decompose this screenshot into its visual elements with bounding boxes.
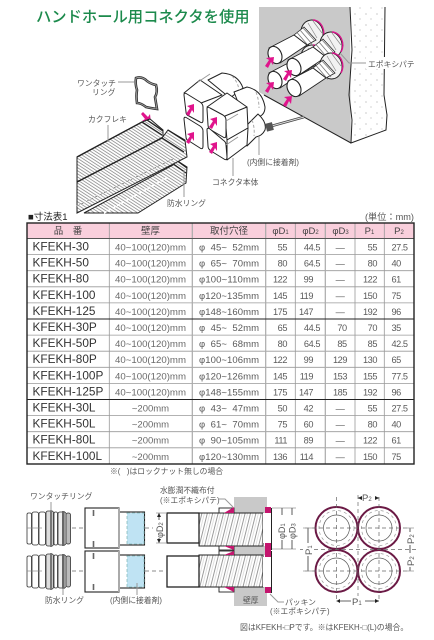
row KFEKH-30: 40~100(120)mm — [115, 242, 186, 254]
row KFEKH-80: 122 — [363, 275, 377, 285]
row KFEKH-100L: ~200mm — [132, 452, 169, 463]
row KFEKH-80L: — — [336, 436, 346, 446]
connector section lower — [85, 551, 144, 592]
row KFEKH-30P: 70 — [337, 323, 347, 333]
row KFEKH-125P: 40~100(120)mm — [115, 387, 186, 398]
left boxes — [184, 80, 222, 149]
row KFEKH-100: 40~100(120)mm — [115, 291, 186, 302]
dimension: D2 — [153, 513, 167, 543]
connector body — [184, 73, 265, 160]
row KFEKH-125: 175 — [273, 307, 287, 317]
row KFEKH-30P: 40~100(120)mm — [115, 323, 186, 334]
right boxes — [198, 74, 248, 160]
row KFEKH-50: 40 — [392, 259, 401, 269]
row KFEKH-125: — — [336, 307, 346, 317]
row KFEKH-30 — [32, 240, 408, 254]
dimension: D1 D3: φD3 — [288, 523, 298, 539]
pink arrows on connector — [186, 104, 217, 154]
row KFEKH-125: 40~100(120)mm — [115, 307, 186, 318]
row KFEKH-125: KFEKH-125 — [32, 304, 96, 318]
table header: φD2 — [302, 226, 319, 237]
row KFEKH-100P: 40~100(120)mm — [115, 371, 186, 382]
row KFEKH-50L: φ 61~ 70mm — [199, 420, 259, 431]
magenta packing — [224, 507, 271, 593]
label: one-touch ring: ワンタッチ — [77, 79, 116, 88]
dimension: D1 D3 — [272, 508, 298, 549]
row KFEKH-100L: 136 — [273, 452, 287, 462]
row KFEKH-80 — [32, 272, 401, 286]
dimension: P2 right — [404, 528, 417, 571]
row KFEKH-100: KFEKH-100 — [32, 288, 96, 302]
row KFEKH-50L: KFEKH-50L — [32, 417, 96, 431]
row KFEKH-50P: 85 — [368, 339, 377, 349]
dimension: P1 bottom: P1 — [352, 597, 362, 608]
row KFEKH-50L: 80 — [368, 420, 377, 430]
row KFEKH-80: φ100~110mm — [199, 275, 259, 286]
row KFEKH-80: KFEKH-80 — [32, 272, 89, 286]
row KFEKH-30L: 50 — [278, 404, 287, 414]
row KFEKH-80: 40~100(120)mm — [115, 275, 186, 286]
row KFEKH-80P: 99 — [304, 355, 313, 365]
row KFEKH-100P: KFEKH-100P — [32, 368, 103, 382]
dimension: D1 D3: φD1 — [277, 523, 287, 539]
row KFEKH-30: 55 — [278, 242, 287, 252]
row KFEKH-125P: 185 — [333, 387, 347, 397]
row KFEKH-125: 192 — [363, 307, 377, 317]
row KFEKH-80P: φ100~106mm — [199, 355, 259, 366]
row KFEKH-100P: 153 — [333, 371, 347, 381]
dimension: P2 top: P2 — [362, 493, 372, 504]
row KFEKH-30P — [32, 320, 401, 334]
row KFEKH-100: — — [336, 291, 346, 301]
row KFEKH-100L: φ120~130mm — [199, 452, 259, 463]
row KFEKH-50P: 40~100(120)mm — [115, 339, 186, 350]
row KFEKH-30L: 42 — [304, 404, 313, 414]
row KFEKH-30: 44.5 — [304, 242, 320, 252]
row KFEKH-50: 40~100(120)mm — [115, 259, 186, 270]
table heading: ■寸法表1 — [28, 211, 68, 223]
tube upper back — [265, 18, 325, 66]
row KFEKH-80L: 89 — [304, 436, 313, 446]
row KFEKH-30L: KFEKH-30L — [32, 400, 96, 414]
row KFEKH-80P: 130 — [363, 355, 377, 365]
row KFEKH-80P: 65 — [392, 355, 401, 365]
row KFEKH-100: 119 — [300, 291, 313, 301]
row KFEKH-50L: 75 — [278, 420, 287, 430]
row KFEKH-30P: 44.5 — [304, 323, 320, 333]
label: connector body: コネクタ本体 — [212, 177, 259, 187]
row KFEKH-125P — [32, 384, 401, 398]
label: one-touch ring: ワンタッチリング — [30, 491, 93, 501]
row KFEKH-100L: 75 — [392, 452, 401, 462]
pink insertion arrows on wall tubes — [265, 57, 292, 107]
pipe back — [77, 119, 163, 184]
row KFEKH-50: 64.5 — [304, 259, 320, 269]
tube upper front — [284, 30, 344, 78]
row KFEKH-50: KFEKH-50 — [32, 256, 89, 270]
label: packing: (※エポキシパテ) — [270, 607, 330, 616]
row KFEKH-80P: 40~100(120)mm — [115, 355, 186, 366]
row KFEKH-30L — [32, 400, 408, 414]
row KFEKH-100L: KFEKH-100L — [32, 449, 102, 463]
row KFEKH-50P: 85 — [337, 339, 347, 349]
row KFEKH-125P: 147 — [299, 387, 313, 397]
corrugated pipes — [77, 119, 187, 213]
glue brush — [265, 117, 304, 132]
row KFEKH-30P: 65 — [278, 323, 287, 333]
row KFEKH-50P: φ 65~ 68mm — [199, 339, 259, 350]
label: one-touch ring — [77, 79, 116, 97]
label: corrugated pipe — [88, 115, 127, 142]
figure caption: 図はKFEKH-□Pです。※はKFEKH-□(L)の場合。 — [240, 622, 408, 632]
label: packing: パッキン — [285, 598, 316, 607]
label: wall thickness: 壁厚 — [243, 595, 259, 605]
table header: 取付穴径 — [210, 225, 248, 237]
table header: 品 番 — [54, 225, 83, 237]
label: fiber cloth — [160, 485, 233, 507]
row KFEKH-50: φ 65~ 70mm — [199, 259, 259, 270]
row KFEKH-30P: 70 — [368, 323, 377, 333]
row KFEKH-50: — — [336, 259, 346, 269]
row KFEKH-30: φ 45~ 52mm — [199, 242, 259, 254]
row KFEKH-125: 96 — [392, 307, 401, 317]
row KFEKH-50L: ~200mm — [132, 420, 169, 431]
row KFEKH-100P: 145 — [273, 371, 287, 381]
label: inside adhesive — [247, 136, 299, 167]
row KFEKH-100: 75 — [392, 291, 401, 301]
row KFEKH-125P: KFEKH-125P — [32, 384, 103, 398]
row KFEKH-80L: φ 90~105mm — [199, 436, 259, 447]
row KFEKH-50L: — — [336, 420, 346, 430]
row KFEKH-30L: 27.5 — [392, 404, 408, 414]
row KFEKH-100L: — — [336, 452, 346, 462]
row KFEKH-50P — [32, 336, 408, 350]
label: epoxy putty — [340, 53, 415, 69]
title: ハンドホール用コネクタを使用 — [36, 5, 250, 27]
row KFEKH-100P: 155 — [363, 371, 377, 381]
row KFEKH-125P: 192 — [363, 387, 377, 397]
row KFEKH-80L: 111 — [274, 436, 287, 446]
row KFEKH-80L: 122 — [363, 436, 377, 446]
row KFEKH-30: 27.5 — [392, 242, 408, 252]
tube lower back — [265, 43, 325, 91]
row KFEKH-80L: KFEKH-80L — [32, 433, 96, 447]
label: waterproof ring — [167, 170, 206, 208]
wall illustration — [259, 7, 387, 143]
row KFEKH-50: 80 — [278, 259, 287, 269]
row KFEKH-30L: φ 43~ 47mm — [199, 404, 259, 414]
row KFEKH-100P: 77.5 — [392, 371, 408, 381]
table header: P1 — [365, 226, 375, 237]
dimension: P1 left: P1 — [304, 545, 315, 555]
table header: φD3 — [332, 226, 349, 237]
row KFEKH-100L — [32, 449, 401, 463]
circle layout drawing — [300, 491, 417, 608]
row KFEKH-80: 99 — [304, 275, 313, 285]
row KFEKH-50L: 40 — [392, 420, 401, 430]
corrugated pipe ends — [27, 510, 70, 590]
row KFEKH-80P: KFEKH-80P — [32, 352, 97, 366]
row KFEKH-80: 61 — [392, 275, 401, 285]
row KFEKH-50P: 64.5 — [304, 339, 320, 349]
pink arrow for ring — [141, 112, 151, 123]
corrugated tubes — [167, 513, 270, 587]
row KFEKH-30: 55 — [368, 242, 377, 252]
pipe middle — [77, 130, 187, 213]
row KFEKH-30: — — [336, 242, 346, 252]
label: fiber cloth: (※エポキシパテ) — [160, 496, 220, 505]
table header: 壁厚 — [141, 225, 160, 237]
row KFEKH-30L: 55 — [368, 404, 377, 414]
row KFEKH-80L: ~200mm — [132, 436, 169, 447]
row KFEKH-30P: φ 45~ 52mm — [199, 323, 259, 334]
row KFEKH-80P: 129 — [333, 355, 347, 365]
label: inside adhesive: (内側に接着剤) — [247, 157, 299, 167]
row KFEKH-80P — [32, 352, 401, 366]
row KFEKH-80: 122 — [273, 275, 287, 285]
label: waterproof ring: 防水リング — [167, 198, 206, 208]
wall — [234, 497, 267, 606]
row KFEKH-100: φ120~135mm — [199, 291, 259, 302]
row KFEKH-50P: 42.5 — [392, 339, 408, 349]
row KFEKH-50 — [32, 256, 401, 270]
cylinders behind — [208, 73, 265, 146]
four circles — [316, 507, 400, 592]
row KFEKH-100 — [32, 288, 401, 302]
label: fiber cloth: 水膨潤不織布付 — [160, 485, 215, 495]
pipe front — [84, 160, 187, 213]
row KFEKH-50P: 80 — [278, 339, 287, 349]
row KFEKH-100P: 119 — [300, 371, 313, 381]
row KFEKH-30L: — — [336, 404, 346, 414]
row KFEKH-30P: KFEKH-30P — [32, 320, 97, 334]
row KFEKH-80L: 61 — [392, 436, 401, 446]
table header: φD1 — [272, 226, 289, 237]
row KFEKH-125 — [32, 304, 401, 318]
collars — [219, 508, 234, 592]
row KFEKH-50L: 60 — [304, 420, 313, 430]
row KFEKH-125P: 96 — [392, 387, 401, 397]
label: packing — [270, 594, 330, 616]
row KFEKH-50: 80 — [368, 259, 377, 269]
row KFEKH-100P — [32, 368, 408, 382]
row KFEKH-80L — [32, 433, 401, 447]
tube lower front — [284, 51, 344, 99]
row KFEKH-100P: φ120~126mm — [199, 371, 259, 382]
label: waterproof ring: 防水リング — [45, 595, 84, 605]
table header: P2 — [394, 226, 404, 237]
row KFEKH-100L: 150 — [363, 452, 377, 462]
dimension: D2: φD2 — [155, 522, 165, 538]
wall section drawing — [153, 485, 330, 616]
row KFEKH-125P: 175 — [273, 387, 287, 397]
dimension: P2 right: P2 — [406, 556, 417, 566]
row KFEKH-125: 147 — [299, 307, 313, 317]
label: corrugated pipe: カクフレキ — [88, 115, 127, 124]
table header — [27, 223, 414, 238]
row KFEKH-100: 150 — [363, 291, 377, 301]
row KFEKH-30L: ~200mm — [132, 404, 169, 414]
table footnote: ※( )はロックナット無しの場合 — [110, 466, 223, 476]
row KFEKH-30: KFEKH-30 — [32, 240, 89, 254]
row KFEKH-100: 145 — [273, 291, 287, 301]
left section drawing — [27, 491, 166, 605]
row KFEKH-80P: 122 — [273, 355, 287, 365]
dimension table — [27, 223, 414, 464]
table rule lines — [27, 223, 414, 464]
row KFEKH-80: — — [336, 275, 346, 285]
unit label: (単位：mm) — [365, 211, 414, 222]
dimension: P2 right: P2 — [406, 534, 417, 544]
row KFEKH-50P: KFEKH-50P — [32, 336, 97, 350]
connector section upper — [85, 508, 144, 548]
label: epoxy putty: エポキシパテ — [368, 60, 415, 69]
row KFEKH-50L — [32, 417, 401, 431]
ring — [118, 77, 157, 109]
row KFEKH-125: φ148~160mm — [199, 307, 259, 318]
row KFEKH-100L: 114 — [300, 452, 313, 462]
row KFEKH-125P: φ148~155mm — [199, 387, 259, 398]
label: one-touch ring: リング — [92, 87, 116, 97]
label: inside adhesive: (内側に接着剤) — [110, 595, 162, 605]
row KFEKH-30P: 35 — [392, 323, 401, 333]
label: connector body — [212, 158, 259, 187]
wall connector tubes — [265, 18, 344, 99]
